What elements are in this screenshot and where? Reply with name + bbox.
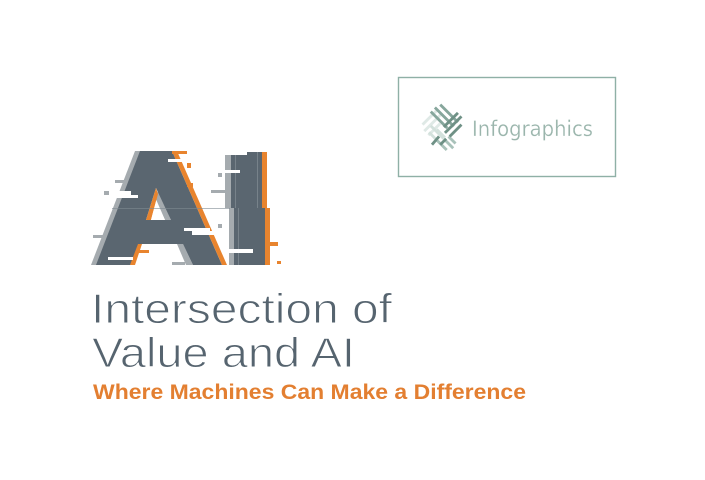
icon: woven logo mark	[423, 105, 461, 150]
logo wordmark: Infographics	[472, 117, 593, 141]
seam line	[112, 207, 230, 210]
letter A counter highlight	[151, 200, 165, 220]
title	[91, 285, 392, 376]
white glitch dashes	[108, 159, 253, 260]
subtitle: Where Machines Can Make a Difference	[93, 381, 526, 404]
panel: logo box	[398, 78, 616, 176]
title: Value and AI	[92, 329, 355, 376]
orange glitch dashes	[138, 151, 281, 264]
letter I lower block	[229, 208, 270, 265]
grey glitch dashes	[93, 173, 228, 265]
icon: glitched AI letters	[91, 151, 281, 265]
letter A orange edge	[130, 151, 227, 265]
title: Intersection of	[91, 285, 392, 332]
letter A shadow	[91, 151, 193, 265]
letter A body	[96, 151, 222, 265]
letter I upper block	[225, 152, 267, 208]
